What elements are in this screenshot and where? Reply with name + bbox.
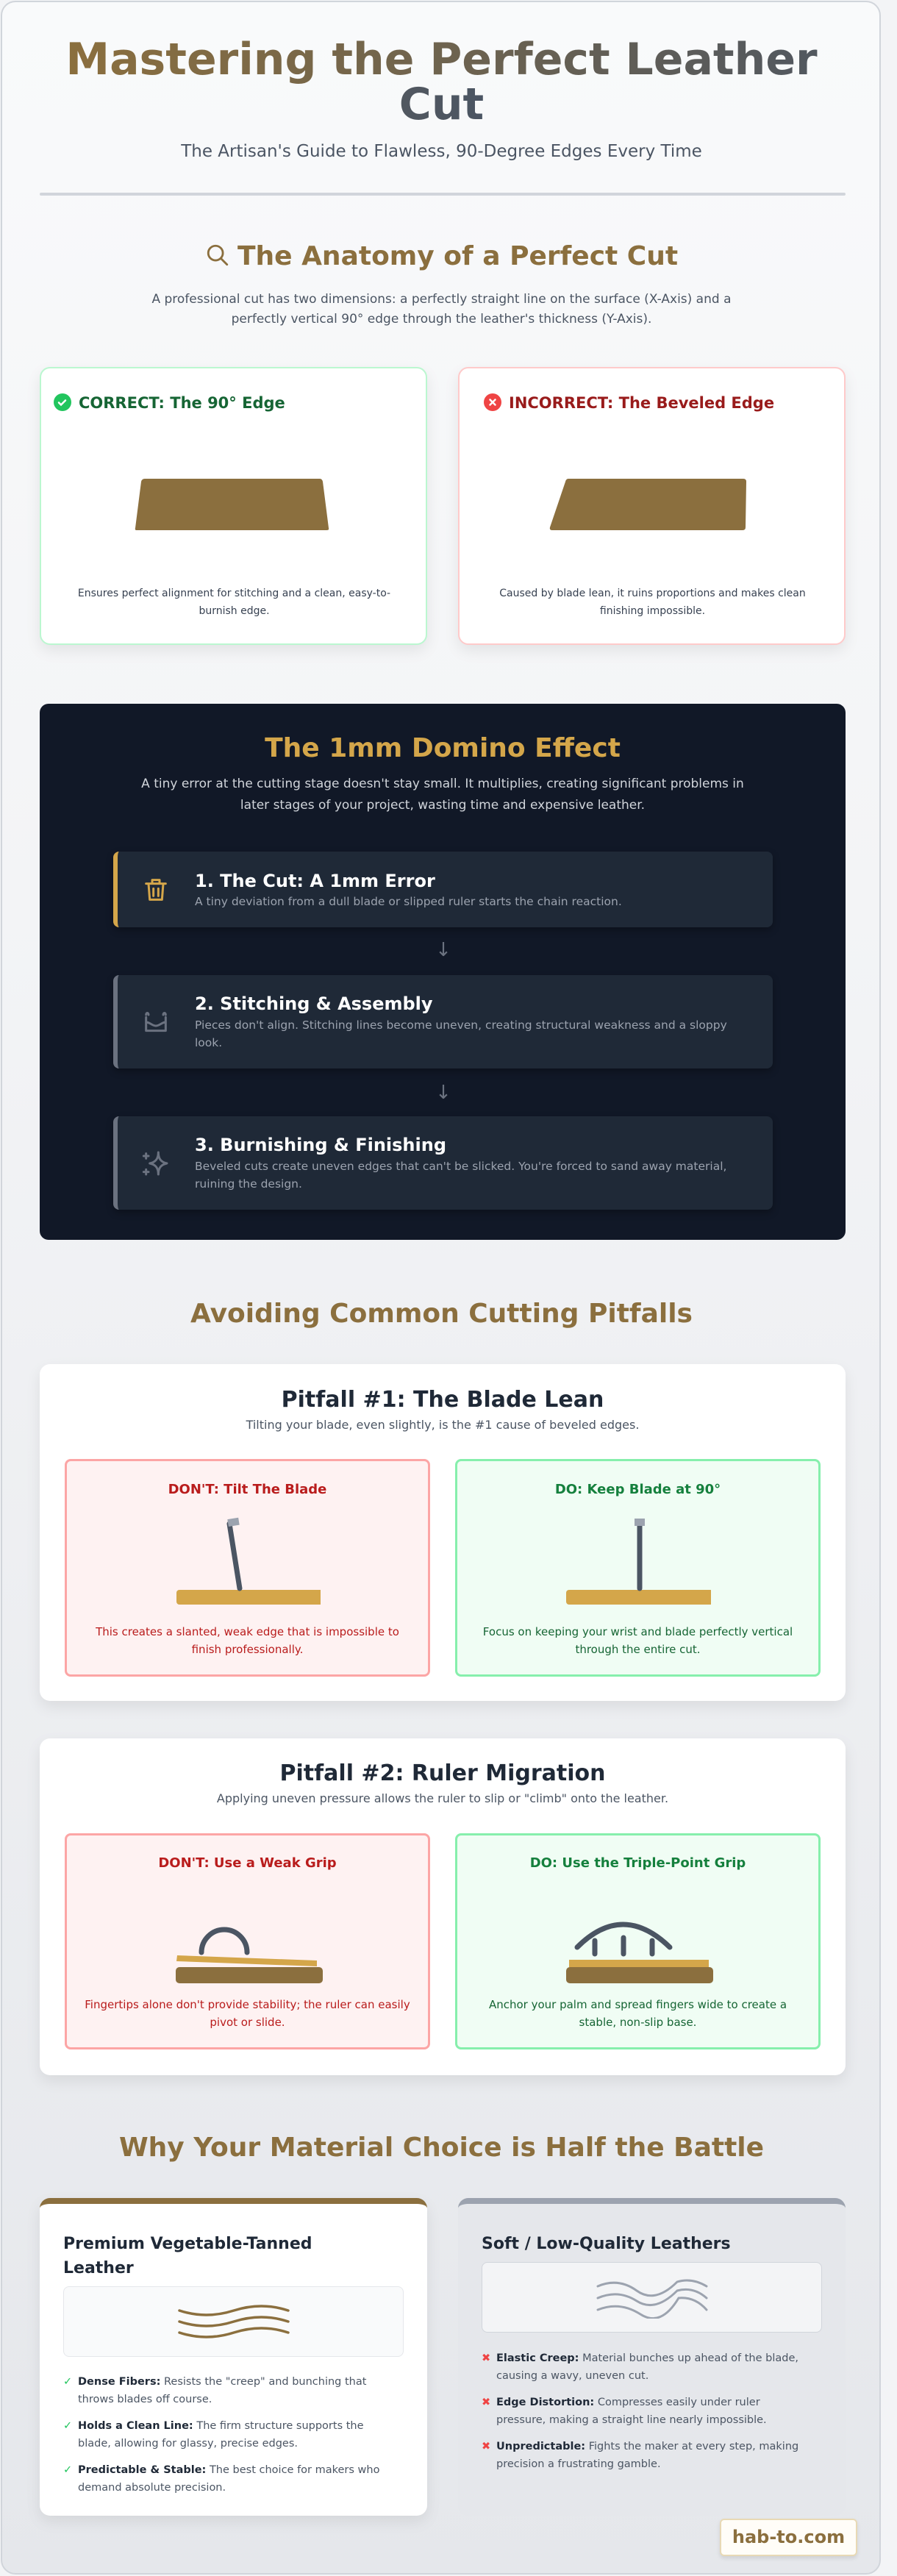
illustration: tilted blade	[176, 1518, 321, 1605]
icon: magnifier	[207, 244, 228, 266]
icon: tight fibers	[63, 2286, 404, 2357]
title: Cut	[399, 79, 484, 130]
dont: weak grip: Fingertips alone don't provide stability; the ruler can easily pivot or slide.	[85, 1998, 410, 2029]
do: keep 90: DO: Keep Blade at 90°	[555, 1482, 721, 1497]
step 3	[113, 1116, 773, 1210]
soft drawbacks list: Unpredictable: Fights the maker at every step, making precision a frustrating gamble.	[496, 2441, 798, 2470]
step 3: Beveled cuts create uneven edges that can't be slicked. You're forced to sand away material, ruining the design.	[195, 1160, 726, 1191]
premium benefits list: ✓	[63, 2420, 72, 2432]
pitfall 2 subtitle: Applying uneven pressure allows the ruler to slip or "climb" onto the leather.	[217, 1791, 668, 1805]
icon: stitching	[145, 1012, 167, 1032]
illustration: weak grip	[176, 1927, 323, 1983]
premium benefits list: ✓	[63, 2376, 72, 2388]
soft drawbacks list: Edge Distortion: Compresses easily under ruler pressure, making a straight line nearly impossible.	[496, 2397, 767, 2426]
premium benefits list: Predictable & Stable: The best choice for makers who demand absolute precision.	[78, 2464, 379, 2494]
soft drawbacks list: Elastic Creep: Material bunches up ahead of the blade, causing a wavy, uneven cut.	[496, 2352, 798, 2382]
premium benefits list: Holds a Clean Line: The firm structure supports the blade, allowing for glassy, precise edges.	[78, 2420, 364, 2450]
dont: tilt blade: DON'T: Tilt The Blade	[168, 1482, 326, 1497]
step 2: 2. Stitching & Assembly	[195, 993, 433, 1014]
caption: incorrect: Caused by blade lean, it ruins proportions and makes clean finishing impossible.	[499, 588, 806, 617]
anatomy intro text: A professional cut has two dimensions: a perfectly straight line on the surface (X-Axis) and a perfectly vertical 90° edge through the leather's thickness (Y-Axis).	[151, 292, 731, 327]
subtitle: The Artisan's Guide to Flawless, 90-Degree Edges Every Time	[181, 142, 702, 161]
badge: hab-to.com	[720, 2519, 857, 2556]
arrow 2: ↓	[435, 1082, 451, 1104]
panel: pitfall 2	[40, 1738, 846, 2075]
section heading: material: Why Your Material Choice is Half the Battle	[119, 2133, 764, 2163]
do: keep 90	[455, 1459, 821, 1677]
heading: incorrect: INCORRECT: The Beveled Edge	[509, 394, 774, 412]
do: keep 90: Focus on keeping your wrist and blade perfectly vertical through the entire cut.	[483, 1625, 793, 1656]
heading: correct: CORRECT: The 90° Edge	[79, 394, 285, 412]
premium benefits list	[63, 2376, 379, 2494]
step 2	[113, 975, 773, 1068]
step 3: 3. Burnishing & Finishing	[195, 1135, 446, 1155]
icon: loose fibers	[482, 2262, 822, 2333]
illustration: triple grip	[566, 1922, 713, 1983]
title	[65, 34, 818, 130]
panel: domino effect	[40, 704, 846, 1240]
section heading: anatomy: The Anatomy of a Perfect Cut	[237, 241, 678, 271]
caption: correct: Ensures perfect alignment for stitching and a clean, easy-to-burnish edge.	[78, 588, 390, 617]
soft drawbacks list: ✖	[482, 2352, 490, 2364]
panel: pitfall 1	[40, 1364, 846, 1701]
soft drawbacks list: ✖	[482, 2397, 490, 2408]
soft drawbacks list	[482, 2352, 798, 2470]
pitfall 1 subtitle: Tilting your blade, even slightly, is the #1 cause of beveled edges.	[246, 1418, 639, 1432]
pitfall 2 title: Pitfall #2: Ruler Migration	[280, 1760, 605, 1786]
domino description: A tiny error at the cutting stage doesn't stay small. It multiplies, creating significant problems in later stages of your project, wasting time and expensive leather.	[141, 777, 744, 813]
premium title: Premium Vegetable-Tanned Leather	[63, 2235, 312, 2277]
panel: soft leather	[458, 2198, 846, 2516]
step 1: 1. The Cut: A 1mm Error	[195, 871, 435, 891]
premium benefits list: Dense Fibers: Resists the "creep" and bunching that throws blades off course.	[78, 2376, 366, 2405]
panel: correct edge	[40, 367, 427, 645]
do: triple point grip	[455, 1833, 821, 2049]
do: triple point grip: DO: Use the Triple-Point Grip	[530, 1855, 746, 1871]
dont: weak grip	[65, 1833, 430, 2049]
panel: premium leather	[40, 2198, 427, 2516]
step 1: A tiny deviation from a dull blade or slipped ruler starts the chain reaction.	[195, 895, 622, 908]
step 2: Pieces don't align. Stitching lines become uneven, creating structural weakness and a sloppy look.	[195, 1018, 727, 1049]
step 1	[113, 852, 773, 927]
dont: tilt blade	[65, 1459, 430, 1677]
arrow 1: ↓	[435, 939, 451, 961]
dont: weak grip: DON'T: Use a Weak Grip	[158, 1855, 337, 1871]
pitfall 1 title: Pitfall #1: The Blade Lean	[282, 1387, 604, 1413]
panel: incorrect edge	[458, 367, 846, 645]
section heading: pitfalls: Avoiding Common Cutting Pitfalls	[190, 1299, 693, 1329]
do: triple point grip: Anchor your palm and spread fingers wide to create a stable, non-slip base.	[489, 1998, 787, 2029]
domino title: The 1mm Domino Effect	[265, 733, 621, 763]
dont: tilt blade: This creates a slanted, weak edge that is impossible to finish professionally.	[96, 1625, 399, 1656]
badge: hab-to.com: hab-to.com	[732, 2527, 845, 2547]
soft title: Soft / Low-Quality Leathers	[482, 2235, 731, 2253]
illustration: straight edge	[135, 479, 329, 530]
icon: sparkle	[143, 1152, 168, 1175]
title: Mastering the Perfect Leather	[65, 34, 818, 85]
illustration: vertical blade	[566, 1519, 711, 1605]
premium benefits list: ✓	[63, 2464, 72, 2476]
soft drawbacks list: ✖	[482, 2441, 490, 2452]
icon: trash	[145, 879, 167, 901]
illustration: beveled edge	[550, 479, 746, 530]
